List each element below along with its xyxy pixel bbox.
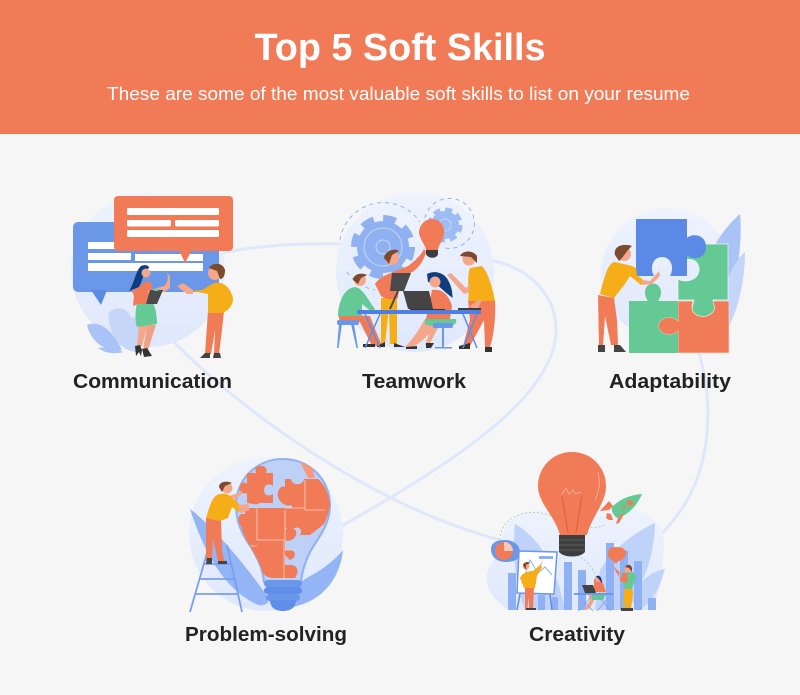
orange puzzle: [658, 301, 729, 353]
man at board: [520, 560, 543, 610]
presentation board: [517, 551, 557, 610]
label: Creativity: Creativity: [529, 624, 626, 646]
header band: [0, 0, 800, 134]
background blob: [336, 192, 494, 352]
orange speech bubble: [114, 196, 233, 263]
background blob: [487, 507, 664, 610]
large gear: [356, 220, 410, 274]
light bulb: [419, 219, 444, 258]
plant leaves: [87, 308, 139, 353]
leaves: [715, 214, 745, 328]
rocket: [600, 494, 642, 524]
label: Problem-solving: Problem-solving: [185, 624, 347, 646]
dashed rings: [340, 198, 474, 290]
desk with woman: [574, 576, 613, 611]
illustration: adaptability: [598, 208, 745, 353]
leaves: [190, 509, 343, 608]
ladder: [190, 545, 242, 612]
label: Teamwork: Teamwork: [362, 371, 467, 393]
pie chart bubble: [491, 540, 520, 562]
man: [177, 264, 233, 358]
green puzzle top right: [678, 244, 728, 316]
bulb base: [264, 580, 302, 611]
dotted trajectory: [500, 512, 605, 577]
laptop in front of green person: [373, 291, 399, 309]
standing person in yellow: [447, 252, 495, 352]
standing person with tablet: [375, 249, 426, 347]
leaves: [514, 523, 665, 610]
green puzzle bottom left: [629, 284, 678, 353]
illustration: teamwork: [336, 192, 495, 352]
laptop: [403, 291, 433, 309]
bar chart: [508, 543, 656, 610]
label: Communication: Communication: [73, 371, 232, 393]
person in green, seated: [337, 274, 382, 348]
illustration: communication: [71, 193, 233, 358]
small gear: [431, 211, 459, 239]
title: Top 5 Soft Skills: [254, 27, 546, 69]
man: [206, 482, 250, 564]
person in green: [612, 565, 636, 611]
blue puzzle: [636, 219, 706, 276]
connecting curves: [172, 244, 708, 540]
woman at the table: [403, 272, 456, 349]
subtitle: These are some of the most valuable soft skills to list on your resume: [107, 84, 690, 104]
illustration: problem-solving: [189, 457, 343, 612]
background circle: [189, 457, 343, 611]
puzzle pieces: [238, 462, 330, 578]
bulb glass: [236, 459, 330, 582]
woman: [129, 265, 170, 357]
illustration: creativity: [487, 452, 665, 611]
background circle: [71, 193, 225, 347]
large light bulb: [538, 452, 606, 556]
stool: [337, 320, 359, 348]
man: [598, 245, 660, 352]
table: [357, 308, 481, 348]
puzzle seams: [250, 480, 325, 578]
background blob: [601, 208, 733, 340]
orange speech bubble: [608, 547, 626, 564]
stool: [433, 323, 453, 348]
blue speech bubble: [73, 222, 219, 305]
label: Adaptability: Adaptability: [609, 371, 732, 393]
